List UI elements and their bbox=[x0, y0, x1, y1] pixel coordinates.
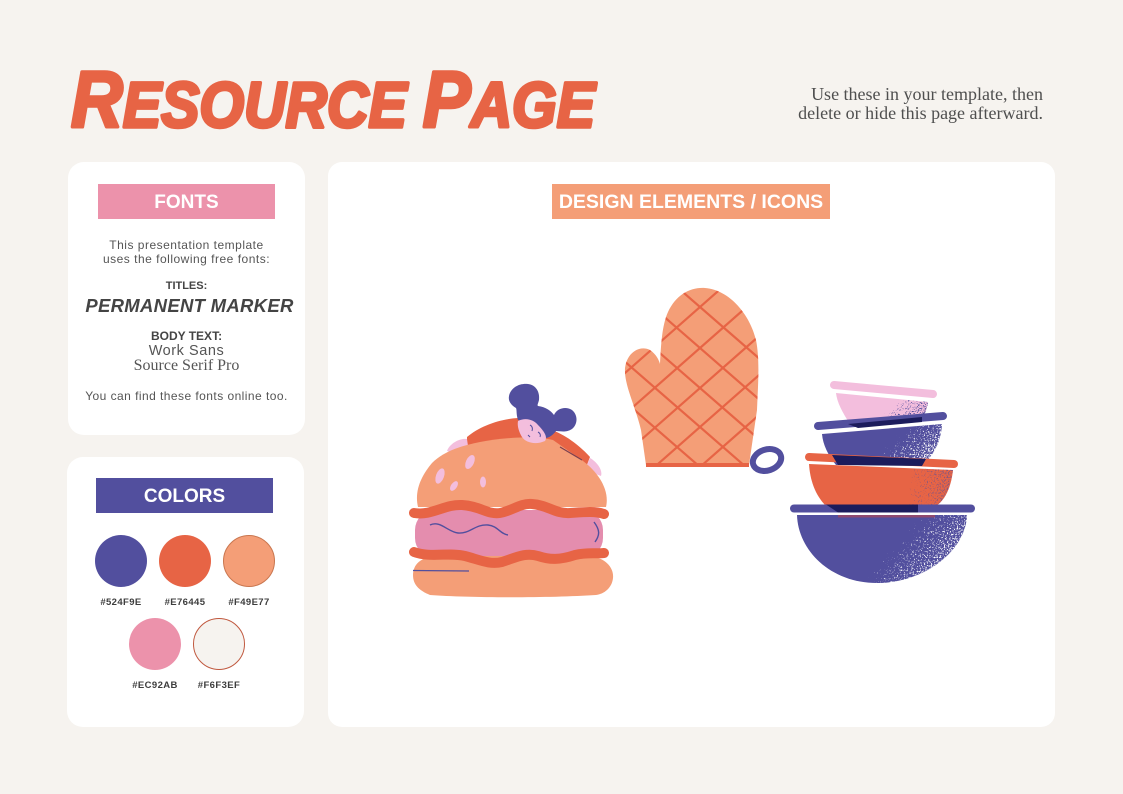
swatch F6F3EF bbox=[193, 618, 245, 670]
patty bbox=[415, 510, 603, 558]
pink bowl bbox=[834, 385, 933, 424]
icon: stacked bowls bbox=[794, 385, 971, 585]
swatch label EC92AB: #EC92AB bbox=[132, 680, 178, 691]
design elements heading: DESIGN ELEMENTS / ICONS bbox=[559, 191, 823, 213]
icon: burger with girl bbox=[413, 384, 613, 597]
fonts heading: FONTS bbox=[154, 192, 219, 213]
title: RESOURCE PAGE bbox=[71, 55, 597, 144]
subtitle note bbox=[798, 84, 1043, 123]
fonts intro text bbox=[103, 238, 270, 266]
body font names: Work Sans bbox=[149, 343, 224, 359]
bottom bun bbox=[413, 556, 613, 597]
colors heading bbox=[96, 478, 273, 513]
bun line bbox=[413, 570, 469, 572]
fonts intro text: uses the following free fonts: bbox=[103, 252, 270, 266]
panel: fonts bbox=[68, 162, 305, 435]
mitt loop bbox=[750, 446, 784, 474]
colors heading: COLORS bbox=[144, 486, 225, 507]
fonts note: You can find these fonts online too. bbox=[85, 389, 288, 403]
swatch label E76445: #E76445 bbox=[165, 597, 205, 608]
swatch EC92AB bbox=[129, 618, 181, 670]
lower wave bbox=[414, 552, 604, 563]
icon: oven mitt bbox=[624, 288, 784, 474]
girl face bbox=[518, 419, 546, 443]
title font name: PERMANENT MARKER bbox=[85, 295, 294, 316]
girl sleeve line bbox=[560, 447, 582, 460]
design elements heading bbox=[552, 184, 830, 219]
subtitle note: delete or hide this page afterward. bbox=[798, 103, 1043, 123]
swatch label F6F3EF: #F6F3EF bbox=[198, 680, 240, 691]
panel: design elements bbox=[328, 162, 1055, 727]
titles label: TITLES: bbox=[166, 280, 207, 292]
body text label: BODY TEXT: bbox=[151, 329, 222, 343]
girl hair bbox=[509, 384, 576, 438]
mitt cuff bbox=[646, 463, 749, 467]
fonts heading bbox=[98, 184, 275, 219]
mitt body bbox=[625, 288, 758, 465]
body font names bbox=[134, 343, 239, 374]
purple medium bowl bbox=[818, 416, 945, 468]
illustrations bbox=[409, 288, 975, 598]
body font names: Source Serif Pro bbox=[134, 356, 239, 374]
swatch F49E77 bbox=[223, 535, 275, 587]
swatch E76445 bbox=[159, 535, 211, 587]
mitt quilting bbox=[625, 290, 758, 463]
girl body bbox=[467, 418, 590, 470]
patty squiggle bbox=[430, 522, 599, 542]
orange bowl bbox=[807, 455, 955, 508]
girl hands bbox=[447, 439, 601, 476]
top bun bbox=[417, 438, 607, 507]
swatch label 524F9E: #524F9E bbox=[100, 597, 142, 608]
girl eyes bbox=[528, 425, 540, 437]
subtitle note: Use these in your template, then bbox=[811, 84, 1043, 104]
panel: colors bbox=[67, 457, 304, 727]
sesame seeds bbox=[434, 454, 486, 492]
fonts intro text: This presentation template bbox=[109, 238, 264, 252]
upper wave bbox=[414, 504, 604, 514]
swatch 524F9E bbox=[95, 535, 147, 587]
swatch label F49E77: #F49E77 bbox=[228, 597, 270, 608]
purple large bowl bbox=[794, 504, 971, 585]
